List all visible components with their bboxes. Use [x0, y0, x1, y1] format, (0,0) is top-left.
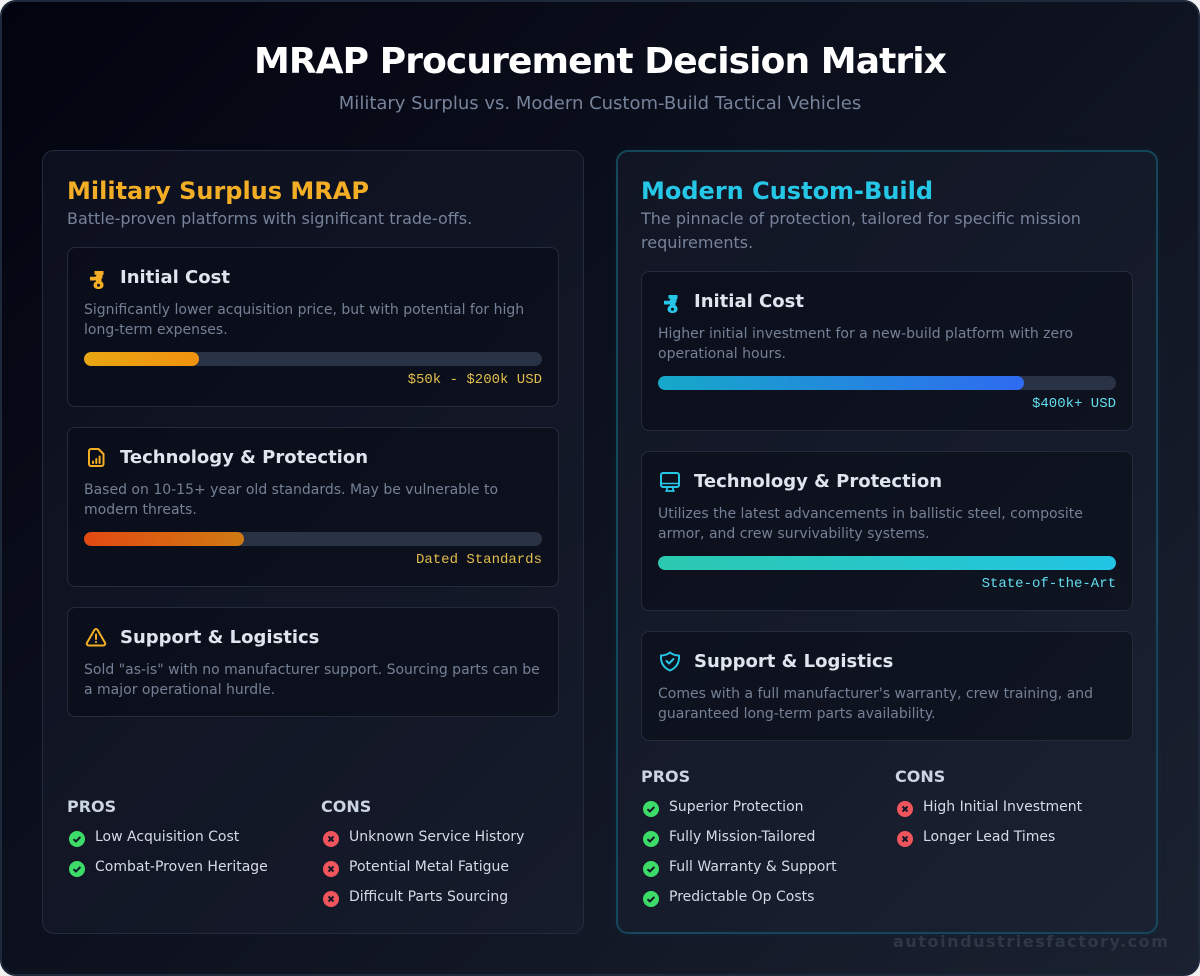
heading: support and logistics: Support & Logistics — [694, 651, 893, 672]
subtitle: Military Surplus vs. Modern Custom-Build Tactical Vehicles — [339, 93, 861, 114]
text: military surplus description: Battle-proven platforms with significant trade-offs. — [67, 209, 472, 228]
heading: military surplus MRAP: Military Surplus MRAP — [67, 177, 369, 205]
panel: modern custom-build background — [616, 150, 1158, 934]
item: low acquisition cost: Low Acquisition Cost — [95, 829, 239, 845]
value: cost: $400k+ USD — [1032, 396, 1116, 412]
heading: support and logistics: Support & Logistics — [120, 627, 319, 648]
item: high initial investment: High Initial Investment — [923, 799, 1082, 815]
heading: pros: PROS — [641, 767, 690, 786]
card: surplus support and logistics — [67, 607, 559, 717]
watermark: autoindustriesfactory.com — [893, 932, 1169, 951]
bar: cost gauge — [84, 352, 542, 366]
icon: warning triangle — [86, 628, 106, 646]
card: surplus technology and protection — [67, 427, 559, 587]
icon: monitor — [660, 472, 680, 492]
icon: custom cost — [664, 295, 678, 313]
heading: initial cost: Initial Cost — [694, 291, 804, 312]
heading: modern custom-build: Modern Custom-Build — [641, 177, 933, 205]
list: custom cons — [895, 767, 1082, 847]
item: superior protection: Superior Protection — [669, 799, 804, 815]
item: predictable op costs: Predictable Op Costs — [669, 889, 814, 905]
heading: cons: CONS — [321, 797, 371, 816]
icon: shield check — [660, 652, 680, 672]
item: full warranty and support: Full Warranty & Support — [669, 859, 837, 875]
panel: military surplus background — [42, 150, 584, 934]
text: support description: Comes with a full manufacturer's warranty, crew training, and guaranteed long-term parts availability. — [658, 686, 1093, 722]
heading: technology and protection: Technology & Protection — [120, 447, 368, 468]
item: unknown service history: Unknown Service History — [349, 829, 524, 845]
heading: pros: PROS — [67, 797, 116, 816]
heading: initial cost: Initial Cost — [120, 267, 230, 288]
item: potential metal fatigue: Potential Metal Fatigue — [349, 859, 509, 875]
value: dated standards: Dated Standards — [416, 552, 542, 568]
card: custom support and logistics — [641, 631, 1133, 741]
text: support description: Sold "as-is" with no manufacturer support. Sourcing parts can be a major operational hurdle. — [84, 662, 540, 698]
item: combat-proven heritage: Combat-Proven Heritage — [95, 859, 268, 875]
value: state of the art: State-of-the-Art — [982, 576, 1116, 592]
item: difficult parts sourcing: Difficult Parts Sourcing — [349, 889, 508, 905]
bar: cost gauge — [658, 376, 1116, 390]
item: fully mission-tailored: Fully Mission-Tailored — [669, 829, 815, 845]
heading: technology and protection: Technology & Protection — [694, 471, 942, 492]
text: custom-build description: The pinnacle of protection, tailored for specific mission requirements. — [641, 209, 1081, 252]
bar: technology gauge — [658, 556, 1116, 570]
bar: technology gauge — [84, 532, 542, 546]
value: cost range: $50k - $200k USD — [408, 372, 542, 388]
text: cost description: Higher initial investment for a new-build platform with zero operational hours. — [658, 326, 1073, 362]
title: MRAP Procurement Decision Matrix — [254, 41, 946, 82]
text: cost description: Significantly lower acquisition price, but with potential for high long-term expenses. — [84, 302, 524, 338]
card: custom technology and protection — [641, 451, 1133, 611]
card: surplus initial cost — [67, 247, 559, 407]
item: longer lead times: Longer Lead Times — [923, 829, 1055, 845]
icon: document with chart — [88, 448, 104, 467]
icon: surplus cost — [90, 271, 104, 289]
heading: cons: CONS — [895, 767, 945, 786]
list: surplus pros — [67, 797, 268, 877]
text: technology description: Based on 10-15+ year old standards. May be vulnerable to modern threats. — [84, 482, 498, 518]
card: custom initial cost — [641, 271, 1133, 431]
list: surplus cons — [321, 797, 524, 907]
text: technology description: Utilizes the latest advancements in ballistic steel, composite armor, and crew survivability systems. — [658, 506, 1083, 542]
list: custom pros — [641, 767, 837, 907]
